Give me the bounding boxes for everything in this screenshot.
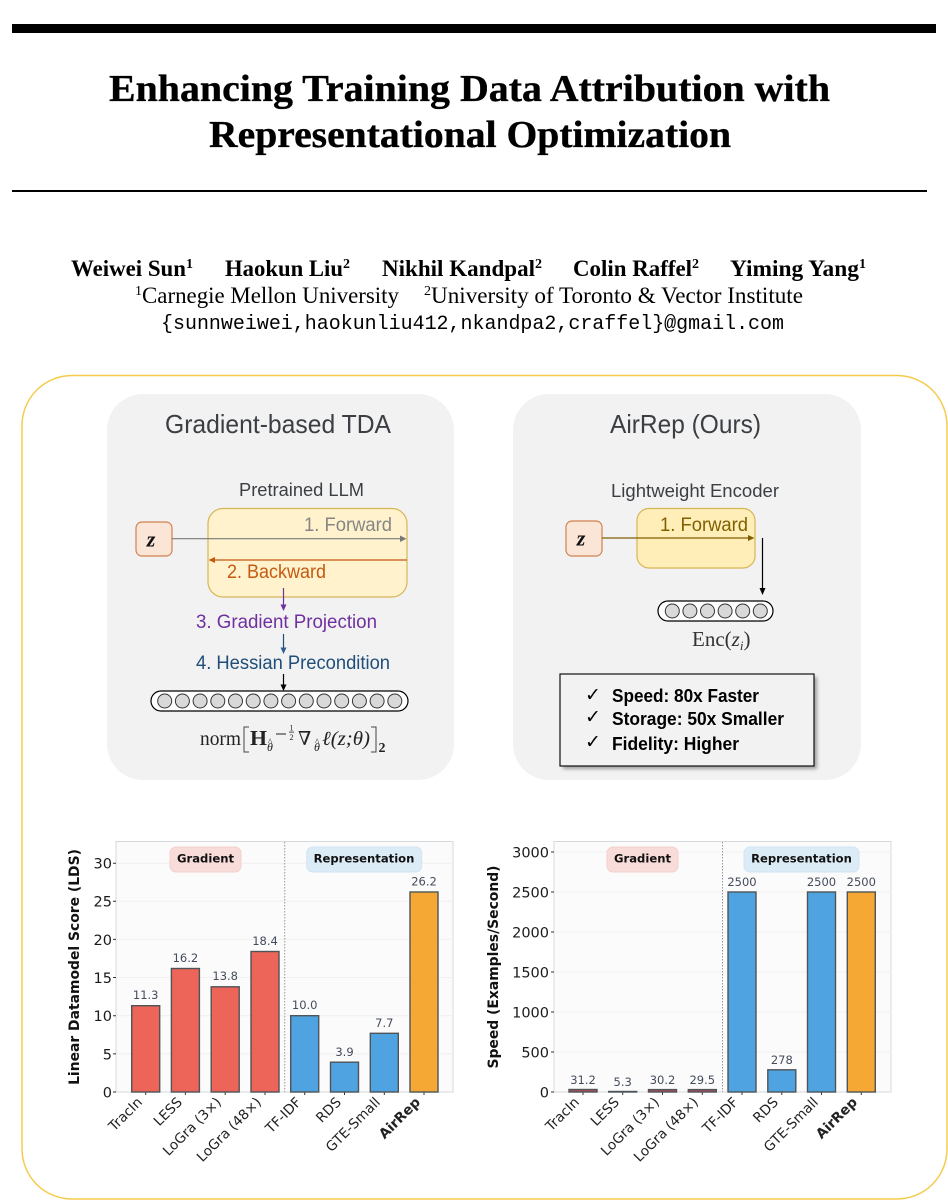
bar values: 31.2 xyxy=(570,1073,596,1087)
bar values: 13.8 xyxy=(212,969,238,983)
formula: 2 xyxy=(378,741,386,756)
y axis ticks: 10 xyxy=(94,1009,112,1025)
x axis labels: LoGra (3×) xyxy=(598,1095,663,1159)
benefits callout xyxy=(560,674,817,769)
authors: Haokun Liu xyxy=(225,256,343,281)
affiliations: 2 xyxy=(424,284,431,299)
formula: norm xyxy=(200,729,241,750)
formula: ^ xyxy=(315,737,320,747)
bar values: 2500 xyxy=(847,875,876,889)
x axis labels: TracIn xyxy=(542,1095,583,1135)
y axis ticks: 2000 xyxy=(512,926,549,942)
x axis labels: GTE-Small xyxy=(761,1095,822,1155)
y axis ticks: 1500 xyxy=(512,966,549,982)
y axis label: Linear Datamodel Score (LDS) xyxy=(67,849,83,1085)
authors: Weiwei Sun xyxy=(71,256,186,281)
bar chart: speed xyxy=(486,842,891,1165)
formula: ^ xyxy=(268,737,273,747)
authors: 2 xyxy=(343,257,350,272)
x axis labels: LESS xyxy=(151,1095,186,1130)
bar values: 26.2 xyxy=(411,874,437,888)
y axis ticks: 15 xyxy=(94,971,112,987)
encoder box xyxy=(637,508,755,568)
bar values: 18.4 xyxy=(252,934,278,948)
authors: Yiming Yang xyxy=(730,256,859,281)
title: Representational Optimization xyxy=(209,114,731,156)
y axis label: Speed (Examples/Second) xyxy=(486,865,502,1069)
bar values: 2500 xyxy=(727,875,757,889)
authors: 1 xyxy=(186,257,193,272)
bar values: 278 xyxy=(771,1053,793,1067)
bar values: 7.7 xyxy=(375,1016,393,1030)
x axis labels: TracIn xyxy=(105,1095,146,1135)
y axis ticks: 1000 xyxy=(512,1006,549,1022)
y axis ticks xyxy=(512,846,549,1102)
bar values: 29.5 xyxy=(689,1073,715,1087)
forward arrow: 1. Forward xyxy=(304,515,392,536)
forward arrow xyxy=(172,515,406,542)
backward arrow xyxy=(208,557,407,583)
authors: 2 xyxy=(692,257,699,272)
bar chart: LDS xyxy=(67,842,453,1165)
x axis labels: LESS xyxy=(588,1095,623,1130)
LLM box xyxy=(208,508,407,597)
authors: Nikhil Kandpal xyxy=(382,256,535,281)
y axis ticks: 25 xyxy=(94,895,112,911)
x axis labels xyxy=(105,1094,424,1165)
panel: AirRep xyxy=(513,394,861,780)
top rule xyxy=(12,24,936,33)
bar values: 3.9 xyxy=(335,1045,354,1059)
x axis labels: TF-IDF xyxy=(262,1094,305,1137)
x axis labels: AirRep xyxy=(813,1094,861,1142)
y axis ticks: 3000 xyxy=(512,846,549,862)
group badges xyxy=(170,847,422,872)
y axis ticks: 0 xyxy=(540,1086,549,1102)
bar values: 16.2 xyxy=(173,951,198,965)
output arrow xyxy=(760,538,766,595)
formula: ∇ xyxy=(298,728,311,750)
embedding vector xyxy=(151,691,408,711)
bars xyxy=(132,892,438,1092)
bars xyxy=(569,892,875,1092)
embedding vector xyxy=(658,601,773,621)
y axis ticks: 20 xyxy=(94,933,112,949)
x axis labels: LoGra (48×) xyxy=(631,1095,702,1165)
bar values xyxy=(570,875,876,1089)
group badges: Representation xyxy=(751,852,852,866)
input z: z xyxy=(576,526,586,550)
y axis ticks: 30 xyxy=(94,857,112,873)
gradient projection step: 3. Gradient Projection xyxy=(196,612,377,633)
x axis labels: GTE-Small xyxy=(323,1095,384,1155)
authors xyxy=(71,256,866,281)
bar values: 10.0 xyxy=(292,998,318,1012)
x axis labels: TF-IDF xyxy=(699,1094,742,1137)
benefits callout: Fidelity: Higher xyxy=(612,733,739,754)
formula xyxy=(200,724,386,756)
x axis labels: RDS xyxy=(750,1095,782,1126)
benefits callout: ✓ xyxy=(585,731,601,753)
formula: 1 xyxy=(290,724,294,732)
output arrow xyxy=(280,674,286,691)
bar values: 30.2 xyxy=(650,1073,675,1087)
affiliations: 1 xyxy=(135,284,142,299)
formula: H xyxy=(250,726,267,750)
affiliations: Carnegie Mellon University xyxy=(142,283,399,308)
model label: Pretrained LLM xyxy=(239,479,364,500)
forward arrow xyxy=(602,515,754,541)
x axis labels: LoGra (48×) xyxy=(194,1095,265,1165)
x axis labels: AirRep xyxy=(376,1094,424,1142)
bar values xyxy=(133,874,437,1059)
x axis labels: RDS xyxy=(313,1095,345,1126)
encoder label: Lightweight Encoder xyxy=(611,480,779,501)
input z xyxy=(566,521,602,556)
gradient projection step xyxy=(196,588,377,633)
encoder formula: Enc(z xyxy=(692,627,740,651)
encoder formula: i xyxy=(740,638,744,653)
panel heading: AirRep (Ours) xyxy=(610,409,761,439)
bar values: 5.3 xyxy=(614,1075,632,1089)
forward arrow: 1. Forward xyxy=(660,515,748,536)
y axis ticks xyxy=(94,857,112,1102)
backward arrow: 2. Backward xyxy=(227,562,326,583)
benefits callout: ✓ xyxy=(585,684,601,706)
encoder formula: ) xyxy=(743,627,750,651)
panel heading: Gradient-based TDA xyxy=(165,409,392,439)
group badges: Gradient xyxy=(614,852,671,866)
group badges xyxy=(607,847,859,872)
bar values: 2500 xyxy=(807,875,836,889)
affiliations xyxy=(135,283,803,308)
hessian precondition step: 4. Hessian Precondition xyxy=(196,653,390,674)
authors: 2 xyxy=(535,257,542,272)
affiliations: University of Toronto & Vector Institute xyxy=(431,283,803,308)
benefits callout: ✓ xyxy=(585,706,601,728)
y axis ticks: 500 xyxy=(521,1046,549,1062)
title xyxy=(109,68,830,156)
formula: θ xyxy=(314,740,320,754)
benefits callout: Storage: 50x Smaller xyxy=(612,708,784,729)
authors: Colin Raffel xyxy=(573,256,692,281)
x axis labels: LoGra (3×) xyxy=(160,1095,225,1159)
benefits callout: Speed: 80x Faster xyxy=(612,685,759,706)
panel: gradient-based TDA xyxy=(107,394,454,780)
formula: ℓ(z;θ) xyxy=(322,728,370,750)
emails: {sunnweiwei,haokunliu412,nkandpa2,craffel}@gmail.com xyxy=(161,313,784,336)
formula: θ xyxy=(267,740,273,754)
bar values: 11.3 xyxy=(133,988,159,1002)
y axis ticks: 0 xyxy=(103,1086,112,1102)
input z: z xyxy=(146,526,156,552)
title: Enhancing Training Data Attribution with xyxy=(109,68,830,110)
x axis labels xyxy=(542,1094,861,1165)
y axis ticks: 2500 xyxy=(512,886,549,902)
main gold panel xyxy=(22,376,947,1199)
formula: 2 xyxy=(290,733,294,742)
group badges: Gradient xyxy=(177,852,234,866)
y axis ticks: 5 xyxy=(103,1047,112,1063)
authors: 1 xyxy=(859,257,866,272)
group badges: Representation xyxy=(314,852,414,866)
hessian precondition step xyxy=(196,634,390,674)
input z xyxy=(136,522,172,556)
